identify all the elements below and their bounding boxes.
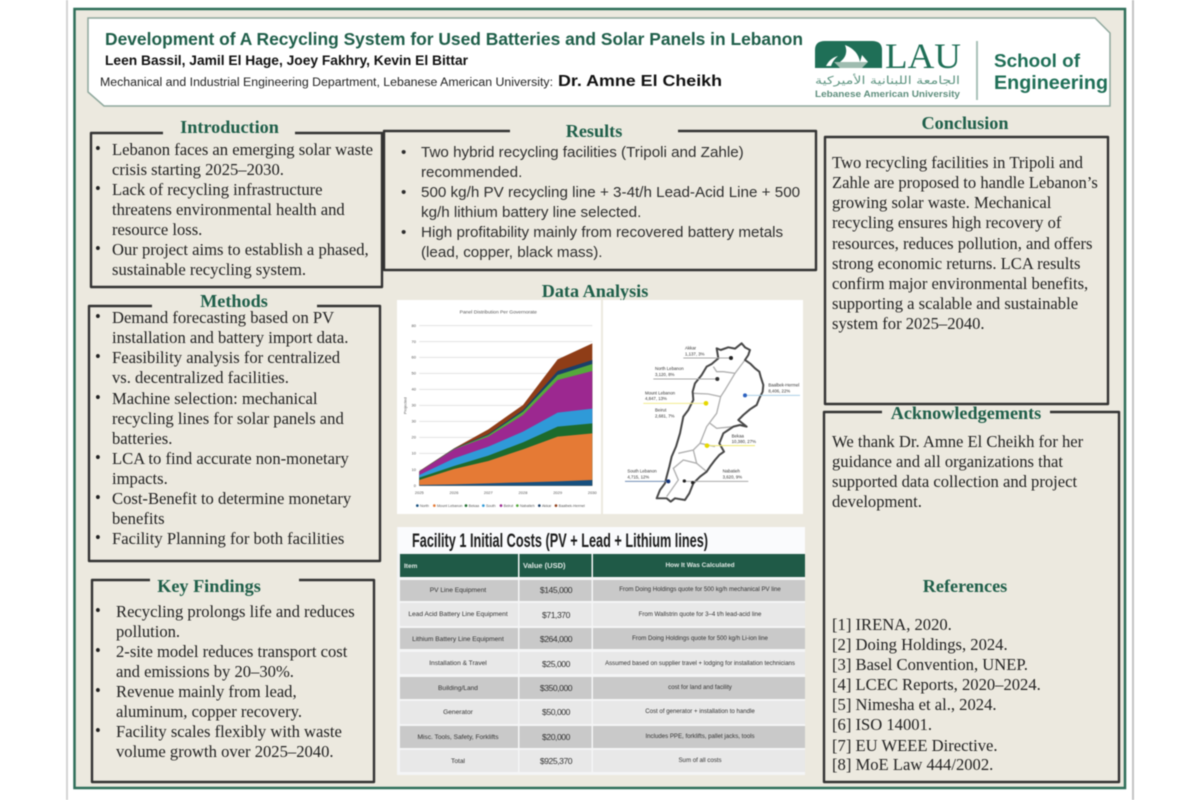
conclusion paragraph: Zahle are proposed to handle Lebanon’s: [832, 173, 1098, 192]
table rows: $25,000: [542, 659, 571, 669]
conclusion paragraph: [832, 153, 1098, 333]
bullet list: introduction: threatens environmental health and: [112, 200, 345, 219]
Arabic name: الجامعة اللبنانية الأميركية: [815, 73, 960, 87]
acknowledgements paragraph: development.: [832, 492, 922, 511]
bullet list: key findings: 2-site model reduces transport cost: [116, 642, 348, 661]
reference list: [2] Doing Holdings, 2024.: [832, 635, 1008, 654]
bullet list: methods: •: [95, 528, 101, 547]
table rows: $50,000: [542, 707, 571, 717]
bullet list: methods: •: [95, 448, 101, 467]
bullet list: key findings: [95, 601, 355, 761]
bullet list: results: 500 kg/h PV recycling line + 3-4t/h Lead-Acid Line + 500: [421, 184, 800, 201]
university name: Lebanese American University: [815, 89, 961, 100]
y axis labels: 10: [412, 451, 417, 456]
bullet list: key findings: •: [95, 681, 101, 700]
bullet list: methods: Demand forecasting based on PV: [112, 308, 334, 327]
conclusion paragraph: system for 2025–2040.: [832, 314, 985, 333]
chart: panel distribution area chart: [397, 300, 601, 514]
bullet list: key findings: Facility scales flexibly with waste: [116, 722, 342, 741]
y axis labels: 0: [414, 483, 417, 488]
map labels: Beirut: [655, 408, 667, 413]
heading: Key Findings: Key Findings: [157, 576, 261, 596]
x axis labels: 2029: [553, 490, 563, 495]
heading: Conclusion: Conclusion: [922, 113, 1008, 133]
bullet list: key findings: Recycling prolongs life and reduces: [116, 602, 355, 621]
y axis labels: 30: [412, 403, 417, 408]
table rows: Building/Land: [438, 685, 478, 692]
x axis labels: 2030: [588, 490, 598, 495]
map labels: Baalbek-Hermel: [768, 382, 799, 387]
table rows: $350,000: [540, 683, 573, 693]
bullet list: methods: impacts.: [112, 469, 168, 488]
bullet list: results: (lead, copper, black mass).: [421, 244, 602, 261]
table rows: $71,370: [542, 610, 571, 620]
affiliation: Mechanical and Industrial Engineering Department, Lebanese American University:: [100, 77, 553, 89]
map labels: Mount Lebanon: [645, 390, 676, 395]
panel: header banner: [88, 18, 1110, 106]
icon: LAU ship emblem: [815, 41, 882, 68]
bullet list: introduction: •: [95, 139, 101, 158]
panel: Acknowledgements and References: [824, 403, 1119, 782]
bullet list: introduction: sustainable recycling system.: [112, 260, 306, 279]
table rows: From Doing Holdings quote for 500 kg/h mechanical PV line: [619, 586, 781, 593]
table rows: Cost of generator + installation to handle: [645, 708, 755, 715]
Engineering: Engineering: [994, 73, 1108, 94]
bullet list: methods: [95, 307, 352, 548]
table rows: [400, 580, 805, 772]
reference list: [4] LCEC Reports, 2020–2024.: [832, 675, 1041, 694]
table rows: Assumed based on supplier travel + lodging for installation technicians: [605, 660, 795, 667]
advisor: Dr. Amne El Cheikh: [558, 73, 722, 90]
stacked areas: [419, 343, 592, 486]
bullet list: results: •: [401, 184, 406, 201]
map labels: 10,380, 27%: [732, 439, 756, 444]
table rows: Sum of all costs: [678, 757, 722, 764]
internal district borders: [667, 360, 745, 497]
x axis labels: 2026: [450, 490, 459, 495]
legend: Nabatieh: [520, 504, 535, 508]
legend: Mount Lebanon: [437, 504, 462, 508]
y axis labels: 80: [412, 323, 417, 328]
bullet list: methods: •: [95, 388, 101, 407]
reference list: [832, 615, 1041, 774]
bullet list: methods: LCA to find accurate non-monetary: [112, 449, 350, 468]
map labels: Nabatieh: [723, 468, 741, 473]
legend: South: [486, 504, 496, 508]
reference list: [3] Basel Convention, UNEP.: [832, 655, 1028, 674]
legend: [416, 504, 585, 508]
bullet list: methods: Facility Planning for both facilities: [112, 529, 344, 548]
reference list: [7] EU WEEE Directive.: [832, 736, 998, 755]
conclusion paragraph: supporting a scalable and sustainable: [832, 294, 1078, 313]
bullet list: methods: Cost-Benefit to determine monetary: [112, 489, 352, 508]
bullet list: introduction: resource loss.: [112, 220, 202, 239]
bullet list: results: •: [401, 224, 406, 241]
acknowledgements paragraph: [832, 432, 1084, 511]
bullet list: methods: •: [95, 307, 101, 326]
heading: Acknowledgements: Acknowledgements: [891, 403, 1041, 423]
bullet list: key findings: •: [95, 641, 101, 660]
reference list: [6] ISO 14001.: [832, 715, 932, 734]
panel: Methods: [89, 291, 380, 561]
legend: Akkar: [542, 504, 552, 508]
y axis labels: 40: [412, 387, 417, 392]
table rows: Total: [451, 758, 465, 765]
table rows: Includes PPE, forklifts, pallet jacks, tools: [645, 733, 755, 740]
bullet list: methods: installation and battery import data.: [112, 328, 348, 347]
table rows: $20,000: [542, 732, 571, 742]
y axis title: Projected: [402, 397, 407, 414]
map labels: 1,137, 3%: [685, 352, 705, 357]
map labels: Bekaa: [732, 433, 745, 438]
map labels: South Lebanon: [627, 468, 657, 473]
bullet list: methods: batteries.: [112, 429, 172, 448]
heading: References: References: [923, 576, 1007, 596]
table rows: Generator: [443, 709, 474, 716]
heading: Introduction: Introduction: [180, 117, 279, 137]
bullet list: methods: benefits: [112, 509, 165, 528]
legend: Bekaa: [469, 504, 480, 508]
table header: How It Was Calculated: [665, 562, 735, 569]
map labels: 4,715, 12%: [627, 474, 649, 479]
bullet list: key findings: pollution.: [116, 622, 180, 641]
bullet list: methods: •: [95, 488, 101, 507]
map labels: 8,406, 22%: [768, 388, 790, 393]
y axis labels: 70: [412, 339, 417, 344]
table rows: $264,000: [540, 634, 573, 644]
reference list: [8] MoE Law 444/2002.: [832, 755, 993, 774]
bullet list: key findings: •: [95, 721, 101, 740]
bullet list: introduction: crisis starting 2025–2030.: [112, 160, 284, 179]
x axis labels: 2028: [519, 490, 528, 495]
panel: Introduction: [91, 117, 382, 287]
panel: Results: [384, 121, 816, 270]
acknowledgements paragraph: We thank Dr. Amne El Cheikh for her: [832, 432, 1084, 451]
bullet list: results: kg/h lithium battery line selected.: [421, 204, 641, 221]
y axis labels: 30: [412, 419, 417, 424]
bullet list: key findings: Revenue mainly from lead,: [116, 682, 297, 701]
table rows: Misc. Tools, Safety, Forklifts: [417, 734, 499, 741]
bullet list: introduction: •: [95, 239, 101, 258]
table rows: Lithium Battery Line Equipment: [412, 636, 504, 643]
conclusion paragraph: growing solar waste. Mechanical: [832, 193, 1052, 212]
map leader lines and markers: [625, 356, 800, 484]
map labels: [627, 346, 799, 479]
map labels: 3,620, 9%: [723, 474, 742, 479]
School of: School of: [994, 51, 1081, 71]
LAU wordmark: LAU: [885, 36, 961, 76]
bullet list: results: [401, 144, 800, 261]
y axis labels: 10: [412, 467, 417, 472]
x axis labels: 2025: [415, 490, 425, 495]
bullet list: key findings: volume growth over 2025–2040.: [116, 742, 334, 761]
country outline: [657, 343, 763, 502]
table rows: $925,370: [540, 756, 573, 766]
x axis labels: [415, 490, 598, 495]
logo: LAU School of Engineering: [815, 36, 1108, 100]
x axis labels: 2027: [484, 490, 494, 495]
acknowledgements paragraph: guidance and all organizations that: [832, 452, 1063, 471]
heading: Methods: Methods: [200, 291, 268, 311]
map labels: Akkar: [685, 346, 697, 351]
table rows: From Doing Holdings quote for 500 kg/h Li-ion line: [632, 635, 769, 642]
authors: Leen Bassil, Jamil El Hage, Joey Fakhry, Kevin El Bittar: [105, 52, 469, 68]
reference list: [5] Nimesha et al., 2024.: [832, 695, 997, 714]
bullet list: methods: •: [95, 347, 101, 366]
y axis labels: 60: [412, 355, 417, 360]
heading: Data Analysis: Data Analysis: [542, 281, 648, 301]
bullet list: results: Two hybrid recycling facilities (Tripoli and Zahle): [421, 144, 744, 161]
table rows: $145,000: [540, 585, 573, 595]
map labels: North Lebanon: [655, 366, 684, 371]
bullet list: key findings: aluminum, copper recovery.: [116, 702, 302, 721]
bullet list: results: High profitability mainly from recovered battery metals: [421, 224, 784, 241]
bullet list: introduction: Lebanon faces an emerging solar waste: [112, 140, 373, 159]
bullet list: introduction: Our project aims to establish a phased,: [112, 240, 369, 259]
conclusion paragraph: resources, reduces pollution, and offers: [832, 234, 1093, 253]
y axis labels: 20: [412, 435, 417, 440]
bullet list: methods: recycling lines for solar panels and: [112, 409, 344, 428]
y axis labels: 50: [412, 371, 417, 376]
conclusion paragraph: confirm major environmental benefits,: [832, 274, 1088, 293]
table rows: cost for land and facility: [668, 684, 733, 691]
legend: Baalbek-Hermel: [559, 504, 585, 508]
chart title: Panel Distribution Per Governorate: [460, 310, 537, 316]
bullet list: key findings: and emissions by 20–30%.: [116, 662, 294, 681]
bullet list: methods: vs. decentralized facilities.: [112, 368, 289, 387]
table header: Value (USD): [523, 561, 566, 570]
bullet list: results: •: [401, 144, 406, 161]
reference list: [1] IRENA, 2020.: [832, 615, 952, 634]
y axis labels: [412, 323, 417, 488]
table rows: Installation & Travel: [429, 660, 487, 667]
table rows: PV Line Equipment: [430, 587, 486, 594]
bullet list: results: recommended.: [421, 164, 522, 181]
table rows: Lead Acid Battery Line Equipment: [408, 611, 508, 618]
conclusion paragraph: recycling ensures high recovery of: [832, 213, 1062, 232]
chart: map of Lebanon governorates: [603, 300, 803, 514]
table title: Facility 1 Initial Costs (PV + Lead + Lithium lines): [412, 531, 708, 552]
map labels: 2,681, 7%: [655, 414, 675, 419]
panel: Key Findings: [92, 576, 374, 782]
legend: Beirut: [504, 504, 513, 508]
bullet list: introduction: Lack of recycling infrastructure: [112, 180, 323, 199]
acknowledgements paragraph: supported data collection and project: [832, 472, 1078, 491]
table header: [400, 554, 805, 577]
heading: Results: Results: [566, 121, 622, 141]
panel: facility cost table: [397, 527, 805, 775]
bullet list: introduction: [95, 139, 373, 279]
legend: North: [420, 504, 429, 508]
bullet list: methods: Machine selection: mechanical: [112, 389, 318, 408]
bullet list: introduction: •: [95, 179, 101, 198]
map labels: 4,847, 13%: [645, 396, 667, 401]
panel: Conclusion: [825, 113, 1108, 404]
bullet list: methods: Feasibility analysis for centralized: [112, 348, 341, 367]
conclusion paragraph: Two recycling facilities in Tripoli and: [832, 153, 1084, 172]
title: Development of A Recycling System for Used Batteries and Solar Panels in Lebanon: [105, 29, 803, 49]
conclusion paragraph: strong economic returns. LCA results: [832, 254, 1080, 273]
table rows: From Wallstrin quote for 3–4 t/h lead-acid line: [639, 611, 762, 618]
table header: Item: [404, 563, 418, 570]
bullet list: key findings: •: [95, 601, 101, 620]
map labels: 3,120, 8%: [655, 372, 675, 377]
